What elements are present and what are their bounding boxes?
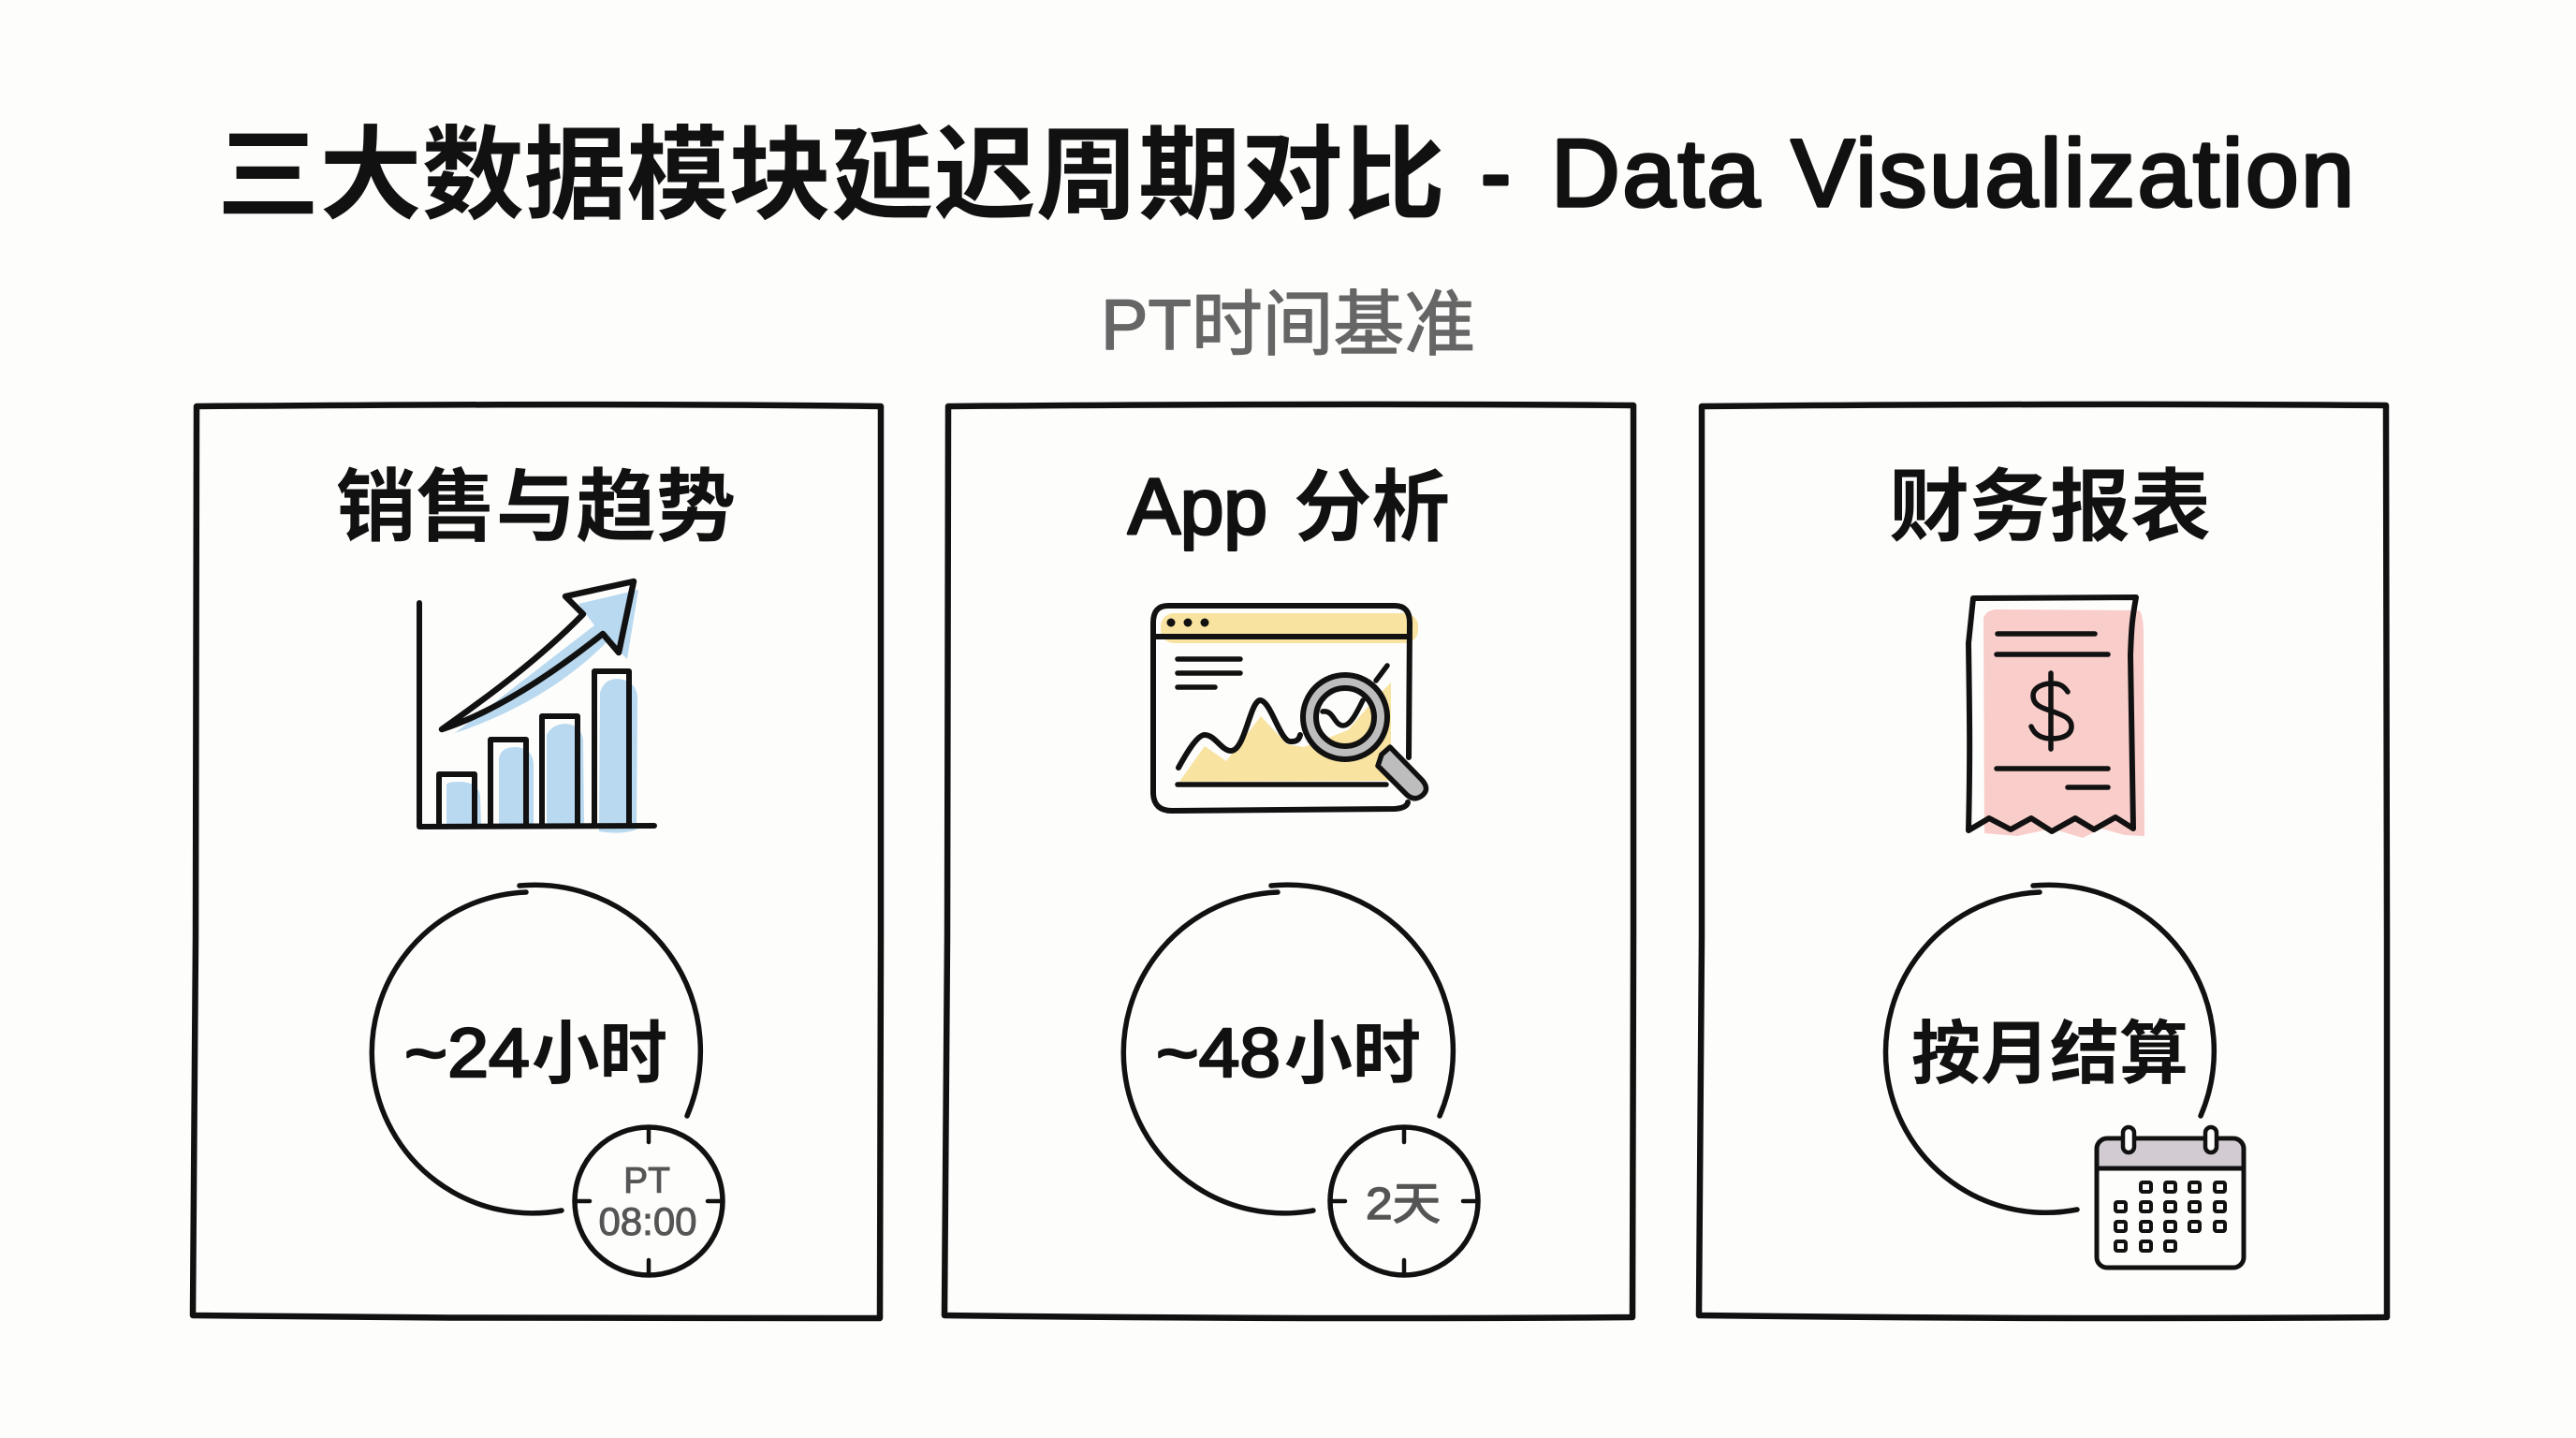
panel frame [1699, 404, 2387, 1318]
delay ring: monthly settlement [1886, 885, 2214, 1212]
title: 三大数据模块延迟周期对比 [217, 119, 1445, 233]
heading: app analytics: App [1128, 462, 1267, 550]
panel: financial reports [1699, 404, 2387, 1318]
delay ring: 48 hours: ~48 [1156, 1014, 1281, 1092]
icon: browser window with magnifier [1153, 606, 1427, 811]
icon: calendar [2097, 1127, 2244, 1268]
icon: receipt [1969, 597, 2144, 838]
title [217, 119, 2354, 233]
subtitle: PT时间基准 [1101, 286, 1475, 365]
heading: app analytics: 分析 [1294, 463, 1450, 551]
heading: financial reports: 财务报表 [1889, 463, 2211, 552]
delay ring: 48 hours [1123, 885, 1453, 1213]
icon: clock PT 08:00: 08:00 [598, 1199, 697, 1243]
delay ring: 48 hours: 小时 [1284, 1015, 1421, 1093]
panel: app analytics [944, 404, 1633, 1318]
heading: sales: 销售与趋势 [336, 463, 736, 552]
delay ring: 24 hours: ~24 [404, 1014, 530, 1092]
icon: bar chart with rising arrow [419, 581, 654, 833]
delay ring: 24 hours [372, 885, 700, 1213]
icon: clock 2 days [1330, 1127, 1478, 1275]
title: - [1481, 119, 1511, 227]
delay ring: monthly settlement: 按月结算 [1911, 1015, 2188, 1093]
panel: sales and trends [193, 404, 881, 1318]
delay ring: 24 hours: 小时 [532, 1015, 667, 1093]
title: Data Visualization [1551, 120, 2354, 227]
panel frame [944, 404, 1633, 1318]
icon: clock PT 08:00 [575, 1127, 723, 1275]
icon: clock PT 08:00: PT [623, 1161, 670, 1201]
panel frame [193, 404, 881, 1318]
heading: app analytics [1128, 462, 1450, 551]
icon: clock 2 days: 2天 [1366, 1180, 1441, 1229]
